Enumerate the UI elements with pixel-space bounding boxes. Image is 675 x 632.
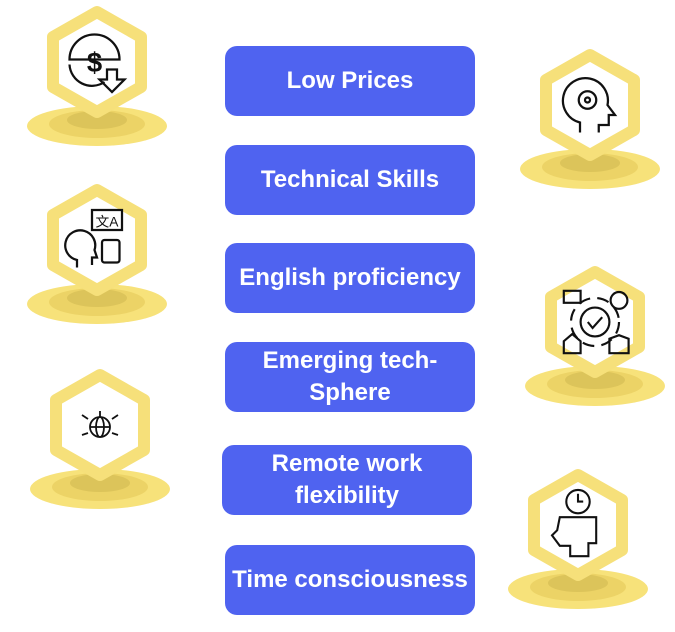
box: low prices — [225, 46, 475, 116]
box: emerging tech: Emerging tech- — [263, 347, 437, 374]
box: emerging tech: Sphere — [309, 379, 391, 406]
marker: remote — [30, 375, 170, 509]
icon: head clock — [552, 490, 596, 556]
box: low prices: Low Prices — [287, 67, 413, 94]
box: english: English proficiency — [239, 264, 461, 291]
marker: time — [508, 475, 648, 609]
marker: technical skills — [520, 55, 660, 189]
icon: speaking translation: 文A — [96, 214, 119, 229]
box: time: Time consciousness — [232, 566, 468, 593]
box: technical skills — [225, 145, 475, 215]
icon: check cycle — [564, 291, 629, 353]
marker: low prices — [27, 12, 167, 146]
icon: head gear — [563, 78, 615, 132]
box: emerging tech — [225, 342, 475, 412]
box: english — [225, 243, 475, 313]
marker: emerging tech — [525, 272, 665, 406]
box: time — [225, 545, 475, 615]
box: remote work — [222, 445, 472, 515]
marker: english — [27, 190, 167, 324]
icon: globe network — [82, 411, 118, 437]
box: remote work: flexibility — [295, 482, 399, 509]
icon: dollar down: $ — [87, 47, 102, 78]
box: technical skills: Technical Skills — [261, 166, 439, 193]
box: remote work: Remote work — [272, 450, 422, 477]
